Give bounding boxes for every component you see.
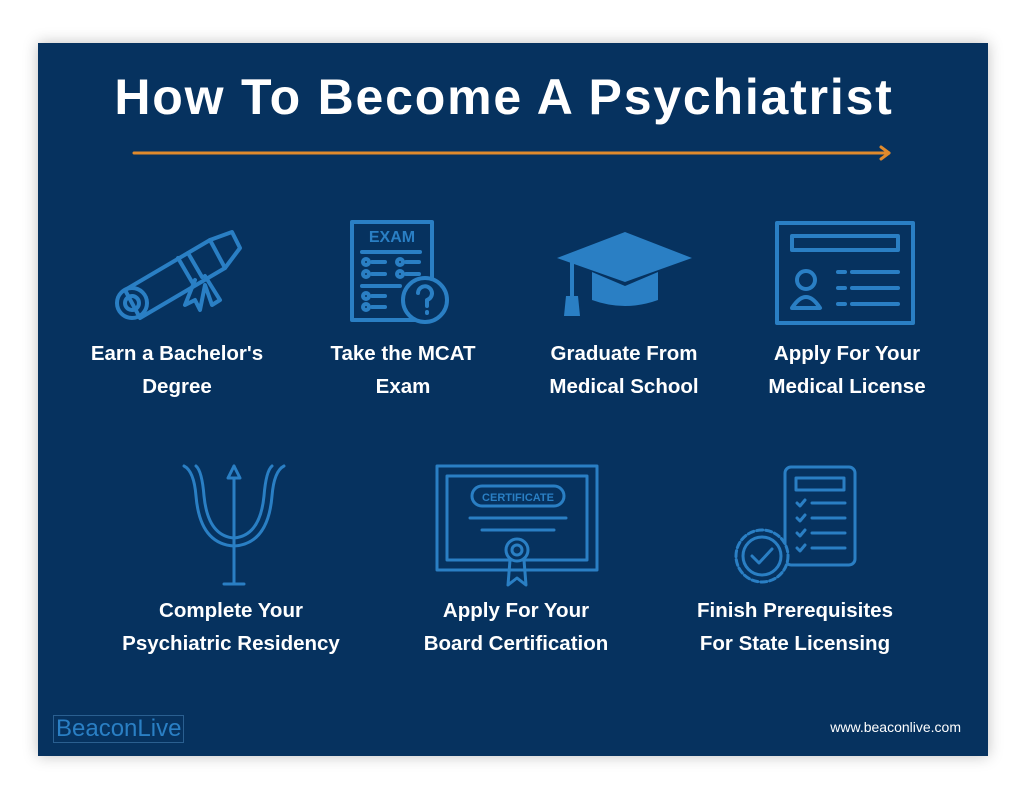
- label: board: Board Certification: [424, 632, 608, 655]
- logo: BeaconLive: [56, 715, 181, 742]
- icon: diploma: [117, 232, 240, 318]
- icon: checklist: [736, 467, 855, 582]
- label: residency: Psychiatric Residency: [122, 632, 340, 655]
- label: license: [768, 342, 926, 398]
- icon: license: [777, 223, 913, 323]
- icon: exam: [352, 222, 447, 322]
- website: www.beaconlive.com: [830, 719, 961, 735]
- label: state: For State Licensing: [700, 632, 890, 655]
- label: board: [424, 599, 608, 655]
- label: bachelor: Degree: [142, 375, 212, 398]
- icon: graduation cap: [557, 232, 692, 316]
- label: bachelor: [91, 342, 263, 398]
- label: residency: [122, 599, 340, 655]
- label: state: Finish Prerequisites: [697, 599, 893, 622]
- label: board: Apply For Your: [443, 599, 589, 622]
- icon: certificate: [437, 466, 597, 585]
- icon: certificate: CERTIFICATE: [482, 492, 554, 504]
- icon: psi: [184, 466, 284, 584]
- label: license: Apply For Your: [774, 342, 920, 365]
- label: state: [697, 599, 893, 655]
- label: license: Medical License: [768, 375, 926, 398]
- label: mcat: [330, 342, 476, 398]
- label: medical school: Graduate From: [551, 342, 697, 365]
- label: residency: Complete Your: [159, 599, 303, 622]
- title: How To Become A Psychiatrist: [114, 69, 894, 125]
- label: medical school: [549, 342, 699, 398]
- arrow: [134, 147, 889, 159]
- label: bachelor: Earn a Bachelor's: [91, 342, 263, 365]
- label: medical school: Medical School: [549, 375, 699, 398]
- icon: exam: EXAM: [369, 229, 415, 246]
- label: mcat: Exam: [376, 375, 430, 398]
- label: mcat: Take the MCAT: [330, 342, 476, 365]
